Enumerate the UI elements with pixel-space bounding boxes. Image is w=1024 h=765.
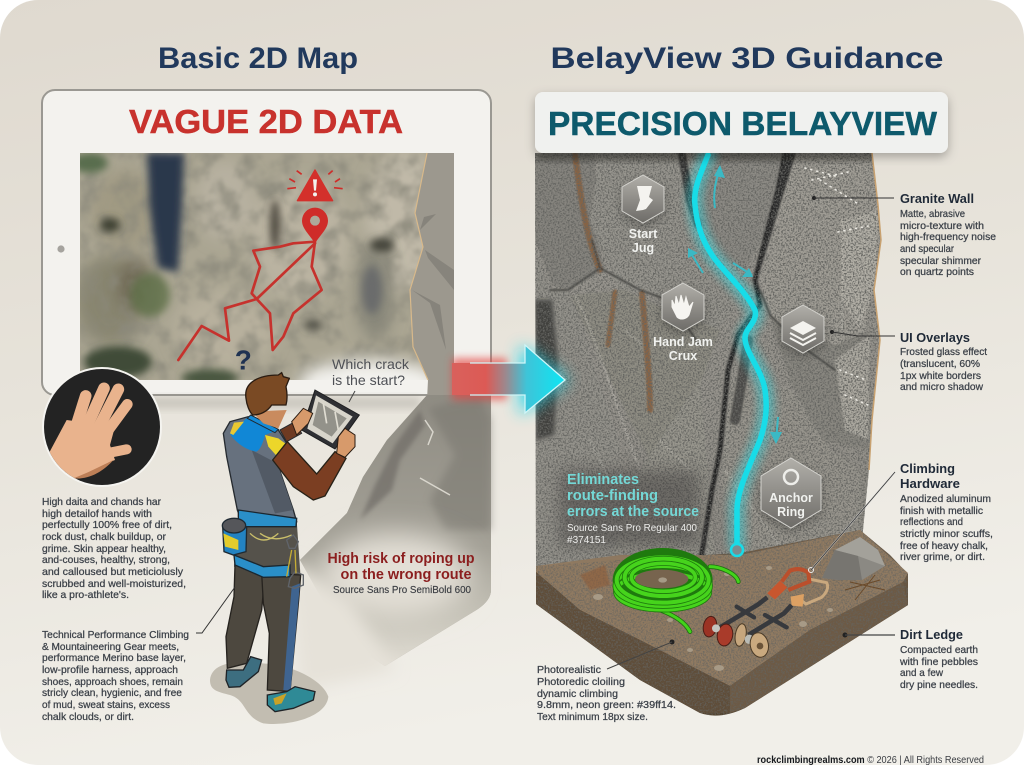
hair <box>246 373 289 415</box>
fade to paper at bottom right <box>290 350 428 380</box>
label: dirt ledge: Dirt Ledge <box>900 627 963 642</box>
marker: anchor ring <box>761 458 821 528</box>
ground shadow <box>210 662 328 724</box>
label: UI overlays: Frosted glass effect <box>900 347 987 358</box>
leader: gear callout <box>196 587 235 633</box>
caption: which crack is the start <box>332 356 410 388</box>
shadow below title bar <box>535 150 885 160</box>
title bar: PRECISION BELAYVIEW <box>535 92 948 153</box>
tablet drop shadow under <box>60 397 420 409</box>
marker: hand jam crux: Hand Jam <box>653 335 713 349</box>
climber figure <box>210 373 359 724</box>
label: rope description <box>537 640 676 723</box>
cracks <box>550 153 842 565</box>
label: rope description: Photorealistic <box>537 665 601 676</box>
label: granite wall: specular shimmer <box>900 256 982 267</box>
cam stems <box>720 597 792 635</box>
marker: start jug <box>622 175 664 255</box>
label: climbing hardware: Hardware <box>900 476 960 491</box>
dogbone sling <box>767 581 787 599</box>
text: technical gear description <box>42 630 189 723</box>
label: granite wall: micro-texture with <box>900 221 984 232</box>
shirt yoke colours <box>230 417 278 452</box>
marker: start jug: Jug <box>632 241 654 255</box>
callout: high risk of roping up: Source Sans Pro SemiBold 600 <box>333 585 471 596</box>
label: climbing hardware: free of heavy chalk, <box>900 541 988 552</box>
far arm <box>280 422 302 442</box>
label: rope description: 9.8mm, neon green: #39ff14. <box>537 700 676 711</box>
direction arrows on route <box>688 165 782 444</box>
callout: eliminates route finding errors: route-finding <box>567 487 658 504</box>
label: granite wall <box>812 191 996 278</box>
label: dirt ledge: with fine pebbles <box>899 657 978 668</box>
label: UI overlays: UI Overlays <box>900 330 970 345</box>
icon: warning triangle <box>287 170 343 201</box>
label: climbing hardware: finish with metallic <box>900 506 983 517</box>
text: technical gear description: chalk clouds, or dirt. <box>42 712 134 723</box>
title bar: PRECISION BELAYVIEW: PRECISION BELAYVIEW <box>548 105 938 142</box>
panel: tablet with vague 2D data <box>42 90 491 408</box>
label: climbing hardware: Anodized aluminum <box>900 494 991 505</box>
marker: anchor ring: Anchor <box>769 491 813 505</box>
text: hand cleanliness description: and-couses, healthy, strong, <box>42 555 170 566</box>
marker: hand jam crux <box>653 283 713 363</box>
panel: granite wall <box>535 150 885 568</box>
hands on tablet <box>292 408 313 435</box>
facets <box>535 153 880 566</box>
callout: high risk of roping up: High risk of roping up <box>328 550 474 567</box>
text: technical gear description: shoes, approach shoes, remain <box>42 677 183 688</box>
label: UI overlays: 1px white borders <box>900 371 981 382</box>
tablet home dot <box>57 245 65 253</box>
label: granite wall: Granite Wall <box>900 191 974 206</box>
pelvis <box>234 520 301 583</box>
callout: high risk of roping up: on the wrong route <box>340 566 472 583</box>
quartz specks <box>805 168 868 405</box>
label: rope description: Text minimum 18px size. <box>537 712 648 723</box>
label: dirt ledge: and a few <box>900 668 943 679</box>
text: hand cleanliness description: high detailof hands with <box>42 509 152 520</box>
label: climbing hardware: river grime, or dirt. <box>900 552 985 563</box>
question mark: ? <box>235 344 252 375</box>
panel: dirt ledge <box>536 530 908 720</box>
boulder <box>822 537 885 580</box>
torso <box>223 417 297 522</box>
label: UI overlays: and micro shadow <box>900 382 983 393</box>
front leg <box>262 573 301 692</box>
icon: location pin <box>302 208 328 243</box>
gear loop carabiners <box>287 535 303 588</box>
label: UI overlays: (translucent, 60% <box>900 359 980 370</box>
callout: eliminates route finding errors <box>560 470 700 546</box>
label: climbing hardware: strictly minor scuffs, <box>900 529 993 540</box>
label: granite wall: high-frequency noise <box>900 232 996 243</box>
satellite map image <box>80 153 427 380</box>
neon route line <box>695 155 766 556</box>
text: hand cleanliness description: rock dust, chalk buildup, or <box>42 532 167 543</box>
callout: eliminates route finding errors: Eliminates <box>567 471 639 488</box>
tan carabiner <box>797 579 828 604</box>
pebbles <box>593 566 833 671</box>
caption: which crack is the start: Which crack <box>332 356 410 372</box>
text: hand cleanliness description <box>42 497 186 601</box>
red route scribble with warning <box>178 170 343 375</box>
marker: start jug: Start <box>629 227 658 241</box>
callout: eliminates route finding errors: errors at the source <box>567 503 699 520</box>
heading: BelayView 3D Guidance: BelayView 3D Guidance <box>550 42 944 75</box>
marker: anchor ring: Ring <box>777 505 805 519</box>
near arm <box>273 442 346 500</box>
speech tick <box>349 391 355 402</box>
text: technical gear description: performance Merino base layer, <box>42 653 186 664</box>
label: dirt ledge: Compacted earth <box>900 645 978 656</box>
marker: hand jam crux: Crux <box>669 349 697 363</box>
pine needles <box>845 575 885 600</box>
text: hand cleanliness description: and calloused but meticiolusly <box>42 567 184 578</box>
chalk bag <box>222 518 247 555</box>
red carabiner <box>782 569 809 590</box>
label: granite wall: and specular <box>900 244 954 255</box>
text: technical gear description: stricly clean, hygienic, and free <box>42 688 182 699</box>
caption: which crack is the start: is the start? <box>332 372 405 388</box>
back shoe <box>226 657 262 687</box>
label: dirt ledge: dry pine needles. <box>900 680 978 691</box>
label: rope description: dynamic climbing <box>537 689 618 700</box>
tablet held <box>302 390 359 449</box>
heading: Basic 2D Map: Basic 2D Map <box>158 42 358 75</box>
route line <box>178 242 322 360</box>
front shoe <box>267 687 315 712</box>
rust streaks <box>575 155 650 410</box>
text: hand cleanliness description: perfectully 100% free of dirt, <box>42 520 172 531</box>
transition arrow: red to cyan <box>452 345 568 415</box>
text: technical gear description: low-profile harness, approach <box>42 665 178 676</box>
label: climbing hardware: reflections and <box>900 517 963 528</box>
harness <box>238 510 297 527</box>
cam lobes <box>702 615 718 638</box>
text: technical gear description: of mud, sweat stains, excess <box>42 700 170 711</box>
climbing hardware <box>702 569 828 659</box>
label: granite wall: on quartz points <box>900 267 974 278</box>
neon green rope coil <box>613 548 738 632</box>
text: hand cleanliness description: scrubbed and well-moisturized, <box>42 579 186 590</box>
label: climbing hardware <box>808 461 993 572</box>
dark left band <box>535 300 558 440</box>
leg stripe <box>283 583 300 691</box>
marker: UI overlays layers icon <box>782 305 824 353</box>
label: climbing hardware: Climbing <box>900 461 955 476</box>
text: hand cleanliness description: High daita and chands har <box>42 497 162 508</box>
tablet title: VAGUE 2D DATA: VAGUE 2D DATA <box>129 103 403 140</box>
callout: eliminates route finding errors: #374151 <box>567 535 606 546</box>
inset: clean hand <box>42 367 162 487</box>
label: rope description: Photoredic cloiling <box>537 677 625 688</box>
label: dirt ledge <box>842 627 978 691</box>
text: technical gear description: Technical Performance Climbing <box>42 630 189 641</box>
text: hand cleanliness description: like a pro-athlete's. <box>42 590 129 601</box>
back leg <box>226 565 265 668</box>
neck <box>252 410 287 428</box>
background rock silhouette behind climber <box>290 153 491 690</box>
text: hand cleanliness description: grime. Skin appear healthy, <box>42 544 166 555</box>
text: technical gear description: & Mountaineering Gear meets, <box>42 642 179 653</box>
callout: eliminates route finding errors: Source Sans Pro Regular 400 <box>567 523 697 534</box>
label: UI overlays <box>830 330 987 393</box>
callout: high risk of roping up <box>328 550 474 596</box>
label: granite wall: Matte, abrasive <box>900 209 965 220</box>
